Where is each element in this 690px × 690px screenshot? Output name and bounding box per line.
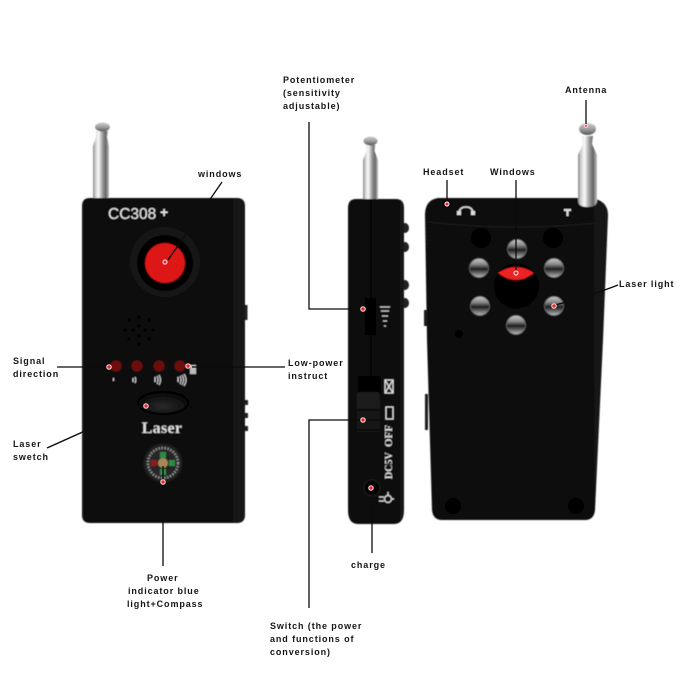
label: switch: and functions of (270, 634, 354, 644)
icon: compass (143, 443, 183, 483)
label: power indicator: indicator blue (128, 586, 200, 596)
label: headset: Headset (423, 167, 464, 177)
label: antenna: Antenna (565, 85, 607, 95)
top face shading (427, 222, 606, 227)
signal strength glyphs (114, 374, 186, 386)
label: laser switch: Laser (13, 439, 42, 449)
label: switch: Switch (the power (270, 621, 362, 631)
speaker holes (123, 315, 155, 346)
charge symbol (379, 492, 394, 502)
label: charge: charge (351, 560, 386, 570)
icon: front antenna (93, 122, 110, 199)
label: power indicator: light+Compass (127, 599, 203, 609)
leader lines (47, 100, 618, 608)
label: windows back: Windows (490, 167, 536, 177)
charge port (364, 480, 380, 496)
switch slot (357, 376, 381, 449)
icon: headphones (459, 207, 473, 214)
bottom holes (445, 498, 461, 514)
label: switch: conversion) (270, 647, 331, 657)
icon: T mark (564, 209, 571, 216)
laser text: Laser (142, 420, 182, 437)
label: power indicator: Power (147, 573, 179, 583)
icon: side antenna (363, 136, 378, 200)
small hole (455, 330, 463, 338)
icon: battery (190, 365, 196, 374)
callout markers (107, 124, 588, 490)
icon: red window (130, 227, 200, 297)
label: potentiometer: Potentiometer (283, 75, 355, 85)
mode icons (385, 380, 393, 419)
DC5V label: DC5V (384, 452, 395, 479)
panel: side device (348, 136, 409, 524)
side bumps (401, 223, 409, 308)
side body (348, 199, 404, 524)
label: low-power: Low-power (288, 358, 344, 368)
panel: back device (424, 123, 608, 520)
level marks (380, 307, 390, 326)
red window (498, 267, 534, 280)
signal LEDs (110, 360, 186, 372)
OFF label: OFF (383, 425, 395, 447)
back body (425, 198, 608, 520)
front body (82, 198, 245, 523)
label: low-power: instruct (288, 371, 328, 381)
potentiometer slot (365, 298, 376, 335)
seam (370, 199, 372, 376)
label: laser switch: swetch (13, 452, 49, 462)
label: potentiometer: adjustable) (283, 101, 340, 111)
headset jack (443, 200, 451, 208)
panel: front device (82, 122, 248, 523)
laser button (138, 392, 188, 414)
plus sign: + (160, 204, 168, 220)
label: potentiometer: (sensitivity (283, 88, 341, 98)
upper holes (471, 228, 491, 248)
icon: back antenna (578, 123, 597, 207)
label: signal direction: direction (13, 369, 59, 379)
label: signal direction: Signal (13, 356, 45, 366)
side nubs (245, 305, 248, 431)
label: windows: windows (197, 169, 242, 179)
lens cavity (494, 264, 539, 308)
back side buttons (424, 310, 428, 430)
model name: CC308 (108, 206, 156, 223)
label: laser light: Laser light (619, 279, 674, 289)
screws (470, 240, 564, 334)
